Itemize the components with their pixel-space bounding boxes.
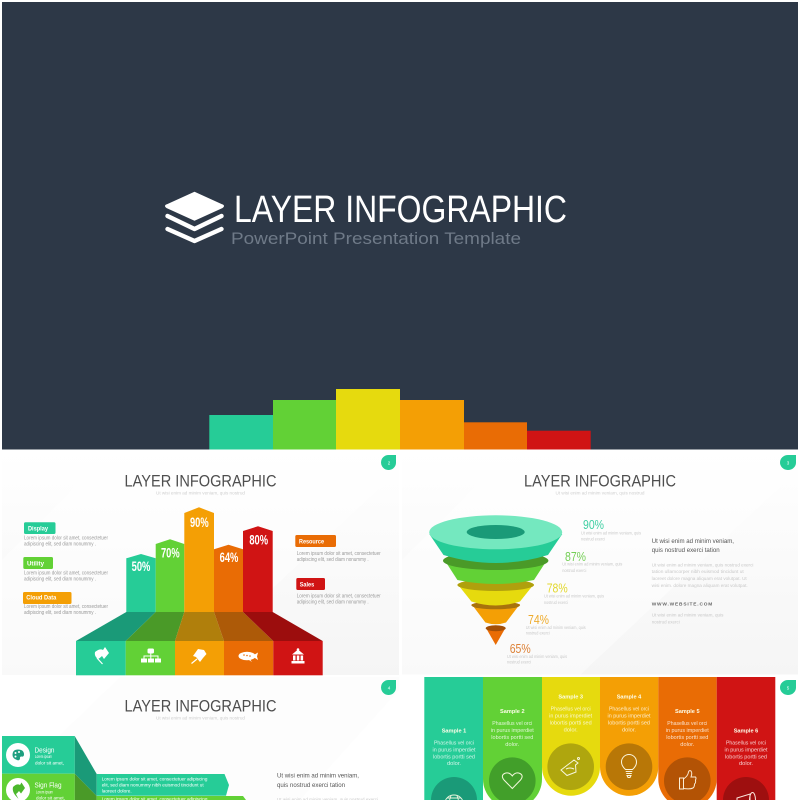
right labels: Sales (300, 582, 315, 588)
stat 78%: nostrud exerci (544, 600, 568, 605)
text block: Ut wisi enim ad minim veniam, quis nostrud exerci (652, 562, 753, 567)
column 6: dolor. (739, 761, 753, 767)
row: Design: dolor sit amet, (35, 760, 64, 766)
panel: slide 3 funnel (402, 452, 798, 675)
text block: quis nostrud exerci tation (652, 547, 720, 554)
panel: slide 5 column cards (402, 677, 798, 800)
column 6: in purus imperdiet (724, 747, 768, 753)
column 1: Phasellus vel orci (434, 740, 474, 746)
column 6: Sample 6 (734, 728, 758, 734)
left labels: adipiscing elit, sed diam nonummy . (24, 610, 96, 616)
right labels: Lorem ipsum dolor sit amet, consectetuer (297, 551, 381, 557)
icon: bank (292, 648, 304, 664)
column 3: in purus imperdiet (549, 714, 593, 720)
panel: slide 4 layered list (2, 675, 399, 800)
row: Sign Flag: Sign Flag (34, 783, 62, 790)
column 6: Phasellus vel orci (726, 740, 766, 746)
arrow label: teal: laoreet dolore. (102, 789, 132, 795)
left labels: Lorem ipsum dolor sit amet, consectetuer (24, 535, 108, 541)
stat 65% (507, 641, 568, 664)
cover title: LAYER INFOGRAPHIC (234, 189, 567, 231)
stat 78%: Ut wisi enim ad minim veniam, quis (544, 594, 605, 599)
column 5: dolor. (680, 742, 694, 748)
arrow bars: 64% (220, 549, 239, 565)
arrow label: green (97, 796, 246, 800)
stat 90% (581, 517, 642, 542)
stat 74%: Ut wisi enim ad minim veniam, quis (526, 625, 586, 630)
badge 5 (780, 680, 796, 695)
column 6: lobortis portti sed (725, 754, 767, 760)
badge 2: 2 (388, 460, 391, 466)
icon: heart (502, 773, 522, 788)
title: LAYER INFOGRAPHIC (124, 697, 276, 716)
column 4: Phasellus vel orci (609, 707, 649, 713)
left labels: Lorem ipsum dolor sit amet, consectetuer (24, 604, 108, 610)
column 2 (483, 677, 542, 800)
right labels: adipiscing elit, sed diam nonummy . (297, 600, 369, 606)
stat 74%: 74% (528, 612, 549, 627)
text block: nostrud exerci (652, 619, 680, 624)
subtitle: Ut wisi enim ad minim veniam, quis nostrud (156, 716, 245, 721)
row: Design: Lorem ipsum (35, 754, 52, 759)
right labels (295, 535, 381, 606)
arrow bars: 50% (132, 558, 151, 574)
badge 2 (381, 455, 396, 470)
right labels: Resource (299, 540, 325, 546)
stat 87%: nostrud exerci (562, 568, 586, 573)
badge 3: 3 (787, 460, 790, 466)
stat 78% (544, 581, 605, 605)
title: LAYER INFOGRAPHIC (524, 472, 676, 491)
row: Design: Design (34, 747, 55, 754)
icon: flag (95, 647, 109, 664)
column 3: lobortis portti sed (550, 720, 592, 726)
column 1 (424, 677, 483, 800)
cover colour bars (209, 389, 591, 450)
column 5: in purus imperdiet (666, 728, 709, 734)
column 5: Sample 5 (675, 709, 700, 715)
left labels: adipiscing elit, sed diam nonummy . (24, 577, 96, 583)
column 2: in purus imperdiet (491, 728, 534, 734)
column 4: lobortis portti sed (608, 720, 650, 726)
arrow label: teal: Lorem ipsum dolor sit amet, consectetuer adipiscing (102, 777, 208, 783)
reflection strip (76, 675, 323, 676)
panel: slide 2 bar chart (2, 452, 399, 675)
dark side folds (75, 736, 97, 800)
column 5 (658, 677, 717, 800)
left labels (23, 522, 108, 616)
badge 4 (381, 680, 396, 695)
column 1: in purus imperdiet (432, 747, 476, 753)
title: LAYER INFOGRAPHIC (124, 472, 276, 491)
column 2: dolor. (505, 742, 519, 748)
column 3 (542, 677, 600, 796)
text block (277, 773, 378, 800)
stat 65%: nostrud exerci (507, 660, 531, 664)
arrow bars (126, 507, 273, 612)
text block: wisi enim. dolore magna aliquam erat volutpat. (652, 583, 748, 588)
icon: flask (561, 758, 580, 776)
stat 78%: 78% (547, 581, 568, 596)
icon: plane (238, 652, 258, 662)
stat 87% (562, 549, 623, 573)
left labels: Utility (27, 561, 45, 567)
text block: tation ullamcorper nibh euismod tincidunt ut (652, 569, 744, 574)
cover subtitle: PowerPoint Presentation Template (231, 229, 521, 248)
icon: megaphone (737, 792, 756, 800)
stat 87%: 87% (565, 549, 586, 564)
column 2: Sample 2 (500, 709, 525, 715)
text block: quis nostrud exerci tation (277, 782, 345, 789)
panel: cover slide (2, 2, 798, 450)
icon: pin (192, 649, 206, 664)
column 2: Phasellus vel orci (492, 721, 532, 727)
funnel graphic (429, 515, 562, 645)
arrow label: teal: elit, sed diam nonummy nibh euismod tincidunt ut (102, 783, 204, 789)
left labels: adipiscing elit, sed diam nonummy . (24, 542, 96, 548)
arrow bars: 90% (190, 514, 209, 530)
column 4 (600, 677, 658, 796)
row: Sign Flag (2, 774, 75, 800)
left labels: Cloud Data (26, 596, 57, 602)
icon: flag (13, 782, 25, 799)
icon: layer stack (166, 192, 223, 241)
stat 74%: nostrud exerci (526, 631, 550, 636)
arrow bars: 70% (161, 544, 180, 560)
icon: org chart (141, 648, 161, 662)
row: Design (2, 736, 75, 774)
column 1: dolor. (447, 761, 461, 767)
column 4: dolor. (622, 727, 636, 733)
badge 4: 4 (388, 686, 391, 690)
column 1: Sample 1 (442, 728, 466, 734)
right labels: Lorem ipsum dolor sit amet, consectetuer (297, 594, 381, 600)
stat 90%: nostrud exerci (581, 536, 605, 542)
subtitle: Ut wisi enim ad minim veniam, quis nostrud (156, 491, 245, 496)
stat 65%: Ut wisi enim ad minim veniam, quis (507, 654, 568, 659)
subtitle: Ut wisi enim ad minim veniam, quis nostrud (556, 491, 645, 496)
arrow bars: 80% (249, 531, 268, 547)
column 2: lobortis portti sed (491, 735, 533, 741)
icon: thumbs up (680, 771, 696, 789)
column 3: dolor. (564, 727, 578, 733)
stat 74% (526, 612, 586, 636)
arrow label: teal (97, 774, 229, 796)
column 6 (717, 677, 775, 800)
text block: WWW.WEBSITE.COM (652, 602, 712, 608)
column 3: Phasellus vel orci (551, 707, 591, 713)
column 4: Sample 4 (617, 694, 642, 700)
icon: palette (12, 750, 24, 760)
stat 90%: 90% (583, 517, 604, 532)
text block: Ut wisi enim ad minim veniam, quis (652, 613, 724, 618)
icon: light bulb (622, 755, 636, 778)
text block: Ut wisi enim ad minim veniam, (277, 773, 359, 780)
column 3: Sample 3 (558, 694, 583, 700)
column 5: Phasellus vel orci (667, 721, 707, 727)
stat 87%: Ut wisi enim ad minim veniam, quis (562, 562, 623, 567)
left labels: Display (28, 527, 49, 533)
badge 5: 5 (787, 686, 790, 690)
column 4: in purus imperdiet (608, 714, 651, 720)
stat 90%: Ut wisi enim ad minim veniam, quis (581, 530, 642, 536)
text block: laoreet dolore magna aliquam erat volutpat. Ut (652, 576, 747, 581)
right labels: adipiscing elit, sed diam nonummy . (297, 557, 369, 563)
column 1: lobortis portti sed (433, 754, 475, 760)
column 5: lobortis portti sed (666, 735, 708, 741)
stat 65%: 65% (510, 641, 531, 656)
left labels: Lorem ipsum dolor sit amet, consectetuer (24, 570, 108, 576)
text block: Ut wisi enim ad minim veniam, (652, 538, 734, 545)
text block (652, 538, 753, 624)
perspective base (76, 612, 323, 675)
badge 3 (780, 455, 796, 470)
icon: globe (445, 795, 463, 800)
row: Sign Flag: Lorem ipsum (36, 789, 53, 794)
